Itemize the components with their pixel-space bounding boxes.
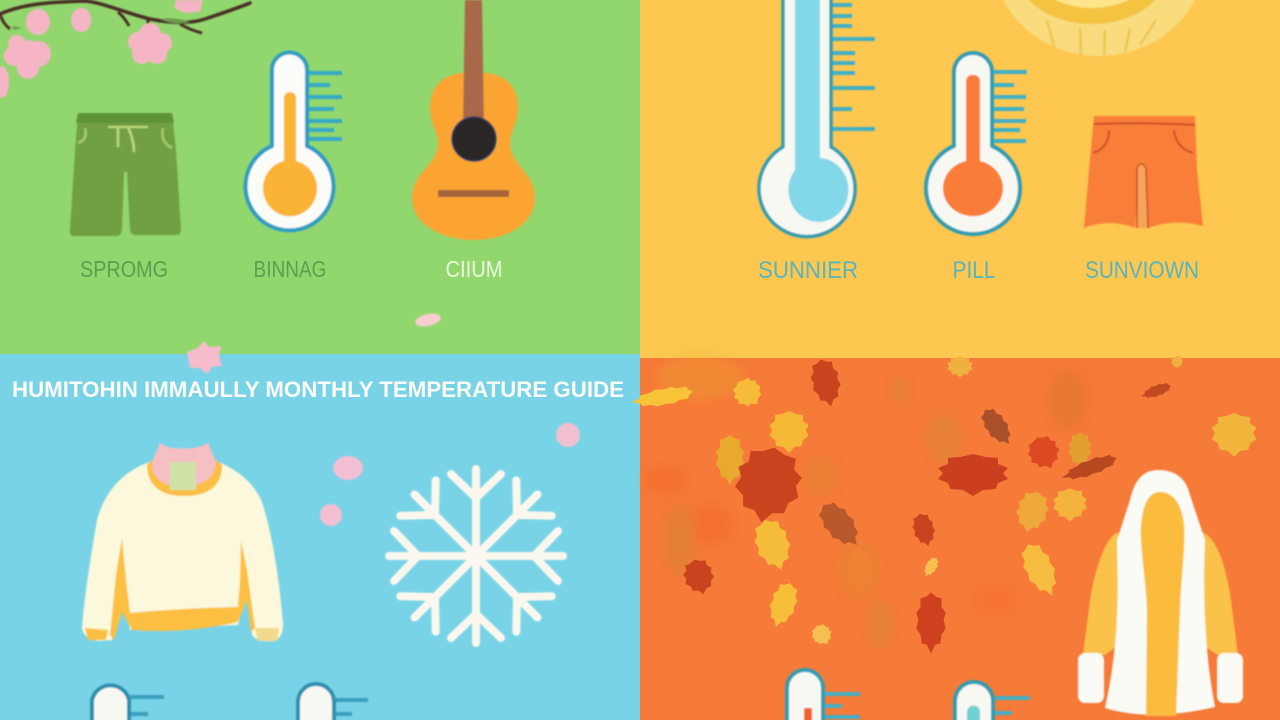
label: summer column three: SUNVIOWN: [1085, 257, 1199, 284]
icon: hooded winter coat: [1078, 470, 1243, 716]
label: summer column two: PILL: [952, 257, 996, 284]
red and brown leaves: [680, 356, 1173, 653]
icon: cropped autumn thermometer two: [955, 682, 1030, 720]
icon: snowflake: [389, 469, 563, 643]
panel: summer background: [640, 0, 1280, 358]
icon: green shorts: [70, 113, 181, 236]
icon: sweater: [82, 443, 283, 641]
icon: large cold thermometer: [759, 0, 875, 237]
panel: spring background: [0, 0, 640, 355]
yellow leaves: [630, 356, 1256, 649]
panel: autumn falling leaves: [630, 356, 1256, 653]
label: summer column one: SUNNIER: [758, 257, 858, 284]
title: HUMITOHIN IMMAULLY MONTHLY TEMPERATURE GUIDE: [12, 377, 624, 402]
icon: cropped winter thermometer one: [92, 685, 164, 720]
label: spring column two: BINNAG: [254, 256, 326, 282]
icon: sun: [993, 0, 1205, 56]
icon: cropped autumn thermometer one: [787, 670, 860, 720]
faint blurred leaves: [643, 356, 1088, 649]
panel: autumn background: [640, 358, 1280, 720]
icon: cherry blossom branch: [0, 0, 250, 98]
icon: orange shorts: [1084, 116, 1203, 228]
label: spring column three: CIIUM: [446, 256, 502, 282]
winter panel content: [82, 423, 580, 720]
spring panel content: [0, 0, 535, 374]
icon: drifting petals: [187, 311, 442, 374]
summer panel content: [759, 0, 1205, 237]
label: spring column one: SPROMG: [80, 256, 168, 282]
icon: pink petals: [320, 423, 580, 526]
autumn clothing and thermometers: [787, 470, 1243, 720]
icon: acoustic guitar: [412, 0, 535, 240]
icon: cropped winter thermometer two: [298, 684, 368, 720]
panel: winter background: [0, 354, 640, 720]
icon: warm thermometer: [926, 53, 1027, 234]
icon: spring thermometer: [246, 52, 342, 230]
